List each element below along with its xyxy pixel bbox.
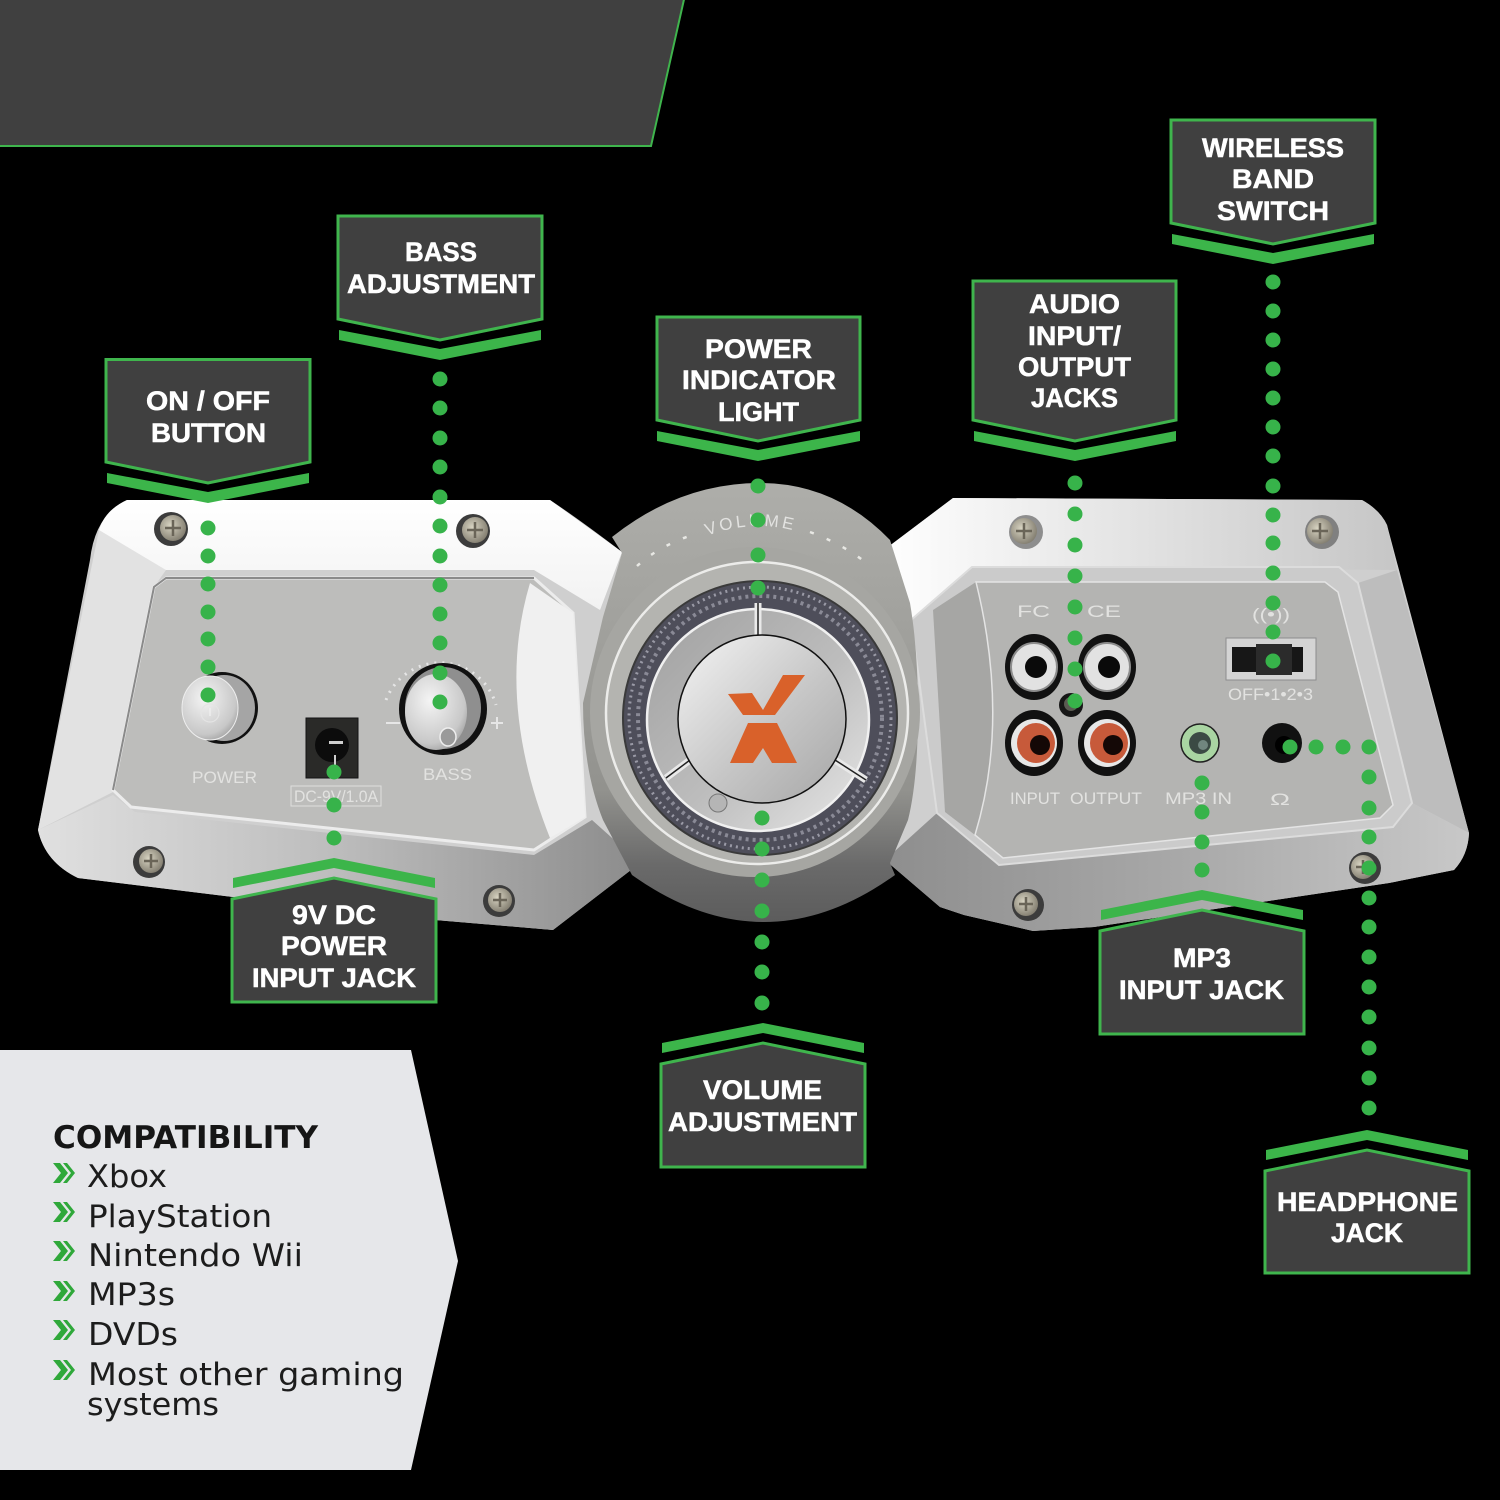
panel: compatibility [0,1050,458,1470]
callout: MP3 input jack [1100,890,1304,1034]
callout: audio input/output jacks: JACKS [1031,383,1118,413]
callout: 9V DC power input jack: POWER [281,931,387,961]
callout: power indicator light: LIGHT [718,397,799,427]
callout: wireless band switch [1171,120,1375,264]
volume scale dots [637,532,870,566]
callout: volume adjustment [661,1023,865,1167]
list: compatible systems: Nintendo Wii [88,1238,303,1274]
port labels: Ω [1270,790,1290,809]
brand X logo [728,675,805,763]
dotted leader: on/off button [200,520,216,702]
port labels: OUTPUT [1070,789,1142,808]
callout: on/off button: BUTTON [151,418,266,448]
callout: power indicator light: POWER [705,334,812,364]
list: compatible systems: Most other gaming [88,1357,404,1393]
label: BASS: BASS [423,765,472,784]
dial segments [647,609,869,831]
callout: bass adjustment: BASS [405,237,477,267]
callout: power indicator light: INDICATOR [682,365,836,395]
callout: headphone jack: HEADPHONE [1277,1187,1458,1217]
callout: wireless band switch: SWITCH [1217,196,1329,226]
list: compatible systems: DVDs [88,1317,178,1353]
callout: volume adjustment: VOLUME [703,1075,822,1105]
callout: wireless band switch: BAND [1232,164,1314,194]
callout: audio input/output jacks: INPUT/ [1028,321,1122,351]
screws: left housing [133,512,515,917]
volume engraving: VOLUME [704,514,794,534]
top-left header banner [0,0,685,146]
port labels: MP3 IN [1165,789,1232,808]
list: compatible systems: systems [87,1387,219,1423]
wireless band switch [1226,638,1316,680]
callout: MP3 input jack: MP3 [1173,943,1231,973]
dotted leader: 9V DC jack [326,764,342,846]
dotted leader: bass adjustment [432,372,448,710]
CE mark: CE [1087,602,1121,621]
label: POWER: POWER [192,768,257,787]
dotted leader: headphone jack [1282,740,1376,1116]
callout: wireless band switch: WIRELESS [1202,133,1344,163]
callout: bass adjustment: ADJUSTMENT [347,269,535,299]
screws: right housing [1009,515,1381,921]
wireless icon: ((•)) [1252,605,1290,624]
dotted leader: audio jacks [1068,476,1082,708]
centre hub [678,635,846,803]
device: right housing [880,498,1469,931]
list: compatible systems: PlayStation [88,1199,272,1235]
callout: audio input/output jacks: AUDIO [1029,289,1120,319]
list: compatible systems: MP3s [88,1277,175,1313]
DC power jack [306,718,358,778]
LED ring [623,581,897,855]
device: left housing [38,500,640,930]
callout: headphone jack [1265,1130,1469,1273]
headphone jack [1262,723,1302,763]
callout: volume adjustment: ADJUSTMENT [668,1107,857,1137]
callout: on/off button [106,360,310,503]
bass knob [386,663,503,755]
callout: audio input/output jacks: OUTPUT [1018,352,1131,382]
label: DC-9V/1.0A: DC-9V/1.0A [294,787,379,806]
port labels [1010,789,1290,809]
indicator light [709,794,727,812]
RCA jacks [1005,634,1136,776]
regulatory marks: FC [1017,602,1050,621]
dotted leader: volume adjustment [754,810,770,1010]
callout: 9V DC power input jack [232,858,436,1002]
outer ring [606,562,908,864]
dotted leader: MP3 jack [1194,776,1210,878]
list: compatible systems: Xbox [87,1159,167,1195]
callout: headphone jack: JACK [1331,1218,1403,1248]
bullet chevrons [53,1163,75,1380]
callout: 9V DC power input jack: 9V DC [292,900,376,930]
port labels: INPUT [1010,789,1060,808]
segment gaps [666,603,866,780]
list: compatible systems [87,1159,404,1423]
callout: bass adjustment [338,216,542,360]
MP3 jack [1181,724,1219,762]
dotted leader: power indicator light [750,478,766,596]
power button [182,672,258,744]
heading: compatibility: COMPATIBILITY [53,1120,319,1156]
callout: 9V DC power input jack: INPUT JACK [252,963,416,993]
outer light band [590,547,920,877]
switch positions label: OFF•1•2•3 [1228,685,1313,704]
callout: audio input/output jacks [973,281,1176,461]
callout: MP3 input jack: INPUT JACK [1119,975,1284,1005]
dotted leader: wireless band switch [1266,274,1280,668]
callout: power indicator light [657,317,860,461]
callout: on/off button: ON / OFF [146,386,270,416]
device: centre volume dial [583,483,920,922]
